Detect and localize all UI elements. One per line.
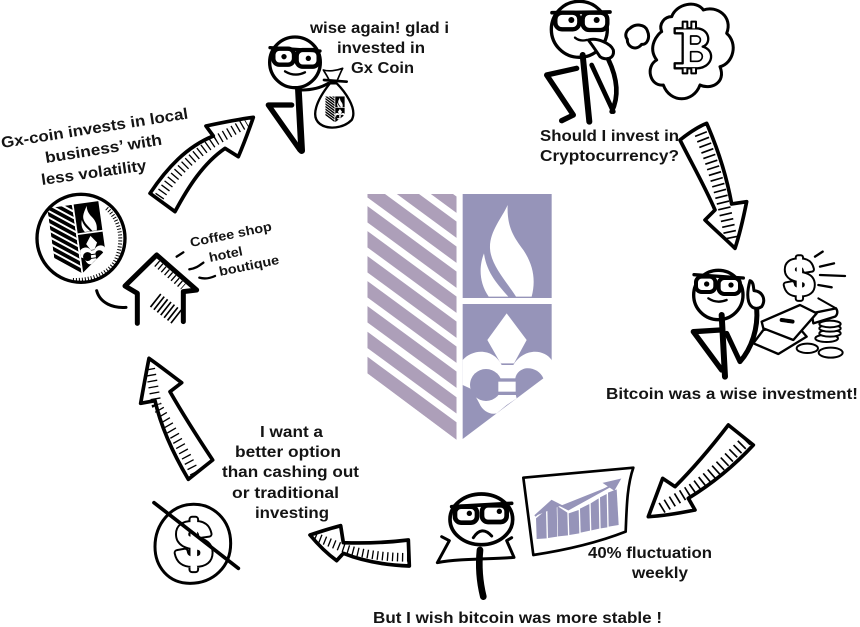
text: gx-coin invests: business’ with xyxy=(44,132,163,167)
text: gx-coin invests xyxy=(0,106,189,189)
stick body xyxy=(268,83,328,151)
text: coffee shop hotel boutique: hotel xyxy=(208,243,244,265)
head with glasses xyxy=(551,1,614,59)
text: coffee shop hotel boutique xyxy=(189,219,280,279)
head with glasses xyxy=(694,270,743,320)
trend arrow xyxy=(535,480,619,516)
text: gx-coin invests: Gx-coin invests in local xyxy=(0,106,189,152)
text: gx-coin invests: less volatility xyxy=(40,157,148,189)
text: wish more stable: But I wish bitcoin was more stable ! xyxy=(373,610,662,627)
icon: money bag with shield xyxy=(315,68,353,128)
icon: thought cloud with bitcoin xyxy=(650,4,733,99)
text: should I invest: Should I invest in xyxy=(540,128,679,145)
head with glasses xyxy=(450,494,513,545)
text: wise again: Gx Coin xyxy=(351,60,414,77)
text: bitcoin was a wise investment: Bitcoin was a wise investment! xyxy=(606,386,858,403)
icon: dollar sign with rays xyxy=(785,250,845,306)
icon: coin with shield xyxy=(37,184,125,282)
icon: dollar sign with rays: $ xyxy=(785,250,813,306)
text: should I invest xyxy=(540,128,679,165)
figure: thinking about bitcoin xyxy=(547,1,733,122)
logo: central shield xyxy=(367,131,552,440)
text: want a better option: I want a xyxy=(260,424,323,441)
icon: crossed out dollar: $ xyxy=(177,510,211,579)
arrow: up to house xyxy=(141,358,213,479)
arrow: down to wise investment xyxy=(680,123,747,248)
text: wise again xyxy=(309,20,449,77)
text: wise again: wise again! glad i xyxy=(309,20,449,37)
figure: thumbs up with money xyxy=(693,250,845,377)
text: want a better option: or traditional xyxy=(232,485,339,502)
text: want a better option: investing xyxy=(255,505,329,522)
arrow: left to crossed dollar xyxy=(310,526,409,566)
pile of money and coins xyxy=(753,298,843,358)
text: fluctuation: weekly xyxy=(631,565,688,582)
text: coffee shop hotel boutique: boutique xyxy=(218,252,280,279)
stick body with thumb up xyxy=(693,281,764,377)
text: want a better option: better option xyxy=(235,444,341,461)
icon: crossed out dollar xyxy=(154,503,238,583)
head with glasses xyxy=(270,37,320,88)
arrow: down-left to chart xyxy=(648,425,753,517)
chart: 40% fluctuation xyxy=(523,468,633,555)
arrow: up-right to happy figure xyxy=(150,117,253,212)
bars xyxy=(536,489,619,539)
text: coffee shop hotel boutique: Coffee shop xyxy=(189,219,273,250)
text: fluctuation xyxy=(588,545,712,582)
stick body xyxy=(437,537,514,597)
icon: small thought bubble xyxy=(626,25,649,48)
icon: crossed out dollar: $ xyxy=(177,510,211,579)
figure: worried person xyxy=(437,494,514,597)
text: wise again: invested in xyxy=(337,40,425,57)
text: should I invest: Cryptocurrency? xyxy=(540,148,679,165)
stick body xyxy=(547,55,616,122)
text: want a better option: than cashing out xyxy=(222,464,359,481)
icon: dollar sign with rays: $ xyxy=(785,250,813,306)
text: fluctuation: 40% fluctuation xyxy=(588,545,712,562)
text: want a better option xyxy=(222,424,359,522)
icon: house xyxy=(97,252,215,323)
figure: happy with money bag xyxy=(268,37,353,151)
